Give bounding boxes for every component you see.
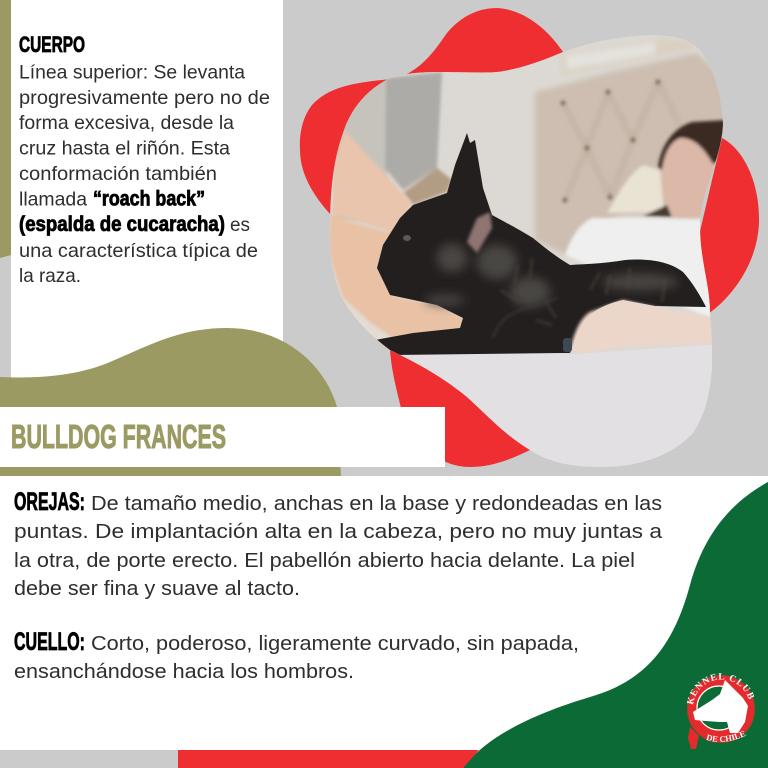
cuerpo paragraph: (espalda de cucaracha) <box>19 213 225 236</box>
title banner <box>0 407 445 467</box>
cuello paragraph <box>14 632 579 683</box>
logo ring <box>688 676 754 742</box>
red blobs behind the photo <box>300 8 759 467</box>
cuello paragraph: ensanchándose hacia los hombros. <box>14 660 354 683</box>
bottom gray bar <box>0 750 178 768</box>
banner background <box>0 407 445 467</box>
shirt <box>565 218 714 320</box>
olive side strip <box>0 0 11 258</box>
sheet under thigh <box>344 302 386 340</box>
logo top text: KENNEL CLUB <box>686 673 754 705</box>
dog <box>375 133 706 355</box>
cuerpo paragraph: forma excesiva, desde la <box>19 112 234 134</box>
logo dog head <box>693 680 748 733</box>
cuerpo paragraph <box>19 62 270 287</box>
cuerpo paragraph: una característica típica de <box>19 240 258 262</box>
left wall shade <box>334 80 388 176</box>
cuerpo paragraph: conformación también <box>19 163 217 185</box>
pillow <box>607 165 664 213</box>
logo: Kennel Club de Chile <box>686 673 755 749</box>
text block: cuerpo <box>19 32 270 287</box>
cuerpo heading: CUERPO <box>19 32 85 57</box>
cuello label: CUELLO: <box>14 628 85 656</box>
cuerpo paragraph: Línea superior: Se levanta <box>19 62 245 84</box>
cuerpo paragraph: cruz hasta el riñón. Esta <box>19 138 230 160</box>
cuerpo paragraph: “roach back” <box>93 188 205 210</box>
back thigh <box>332 130 412 233</box>
orejas paragraph <box>14 492 663 600</box>
bed sheet <box>375 344 720 470</box>
text block: cuello <box>14 628 579 683</box>
headboard tuft lines <box>583 86 662 194</box>
logo inner circle <box>697 686 741 730</box>
headboard tufts <box>560 79 661 203</box>
bottom red bar <box>178 750 479 768</box>
gray upper background <box>0 0 768 476</box>
hand <box>570 300 715 353</box>
fur highlights <box>425 244 678 307</box>
title: BULLDOG FRANCES <box>11 418 226 455</box>
green corner shape <box>463 482 768 768</box>
brindle streaks <box>500 258 665 325</box>
dog body <box>375 133 706 355</box>
face <box>662 138 722 218</box>
hair <box>658 120 726 170</box>
orejas paragraph: puntas. De implantación alta en la cabeza, pero no muy juntas a <box>14 520 663 543</box>
orejas paragraph: debe ser fina y suave al tacto. <box>14 577 300 600</box>
collar <box>563 338 572 352</box>
dog eye <box>403 235 411 241</box>
headboard <box>535 53 726 255</box>
cuello paragraph: Corto, poderoso, ligeramente curvado, sin papada, <box>91 632 579 655</box>
front leg highlight <box>493 298 558 338</box>
cuerpo paragraph: llamada <box>19 188 87 210</box>
wall <box>330 35 712 360</box>
gray panel <box>385 72 442 190</box>
orejas paragraph: la otra, de porte erecto. El pabellón abierto hacia delante. La piel <box>14 549 635 572</box>
orejas paragraph: De tamaño medio, anchas en la base y redondeadas en las <box>91 492 662 515</box>
panel: cuerpo background <box>11 0 283 380</box>
photo: dog with woman on bed <box>320 30 740 470</box>
front thigh <box>328 214 464 338</box>
logo leash tail <box>688 727 699 749</box>
orejas label: OREJAS: <box>14 488 85 516</box>
olive wave shape <box>0 328 341 476</box>
cuerpo paragraph: la raza. <box>19 265 81 287</box>
hair under chin <box>643 205 672 217</box>
cardboard box <box>403 168 452 205</box>
picture frame <box>560 38 700 76</box>
inner ear <box>467 212 492 253</box>
text block: orejas <box>14 488 663 600</box>
cuerpo paragraph: es <box>230 214 250 236</box>
logo bottom text: DE CHILE <box>706 730 746 742</box>
cuerpo paragraph: progresivamente pero no de <box>19 87 270 109</box>
